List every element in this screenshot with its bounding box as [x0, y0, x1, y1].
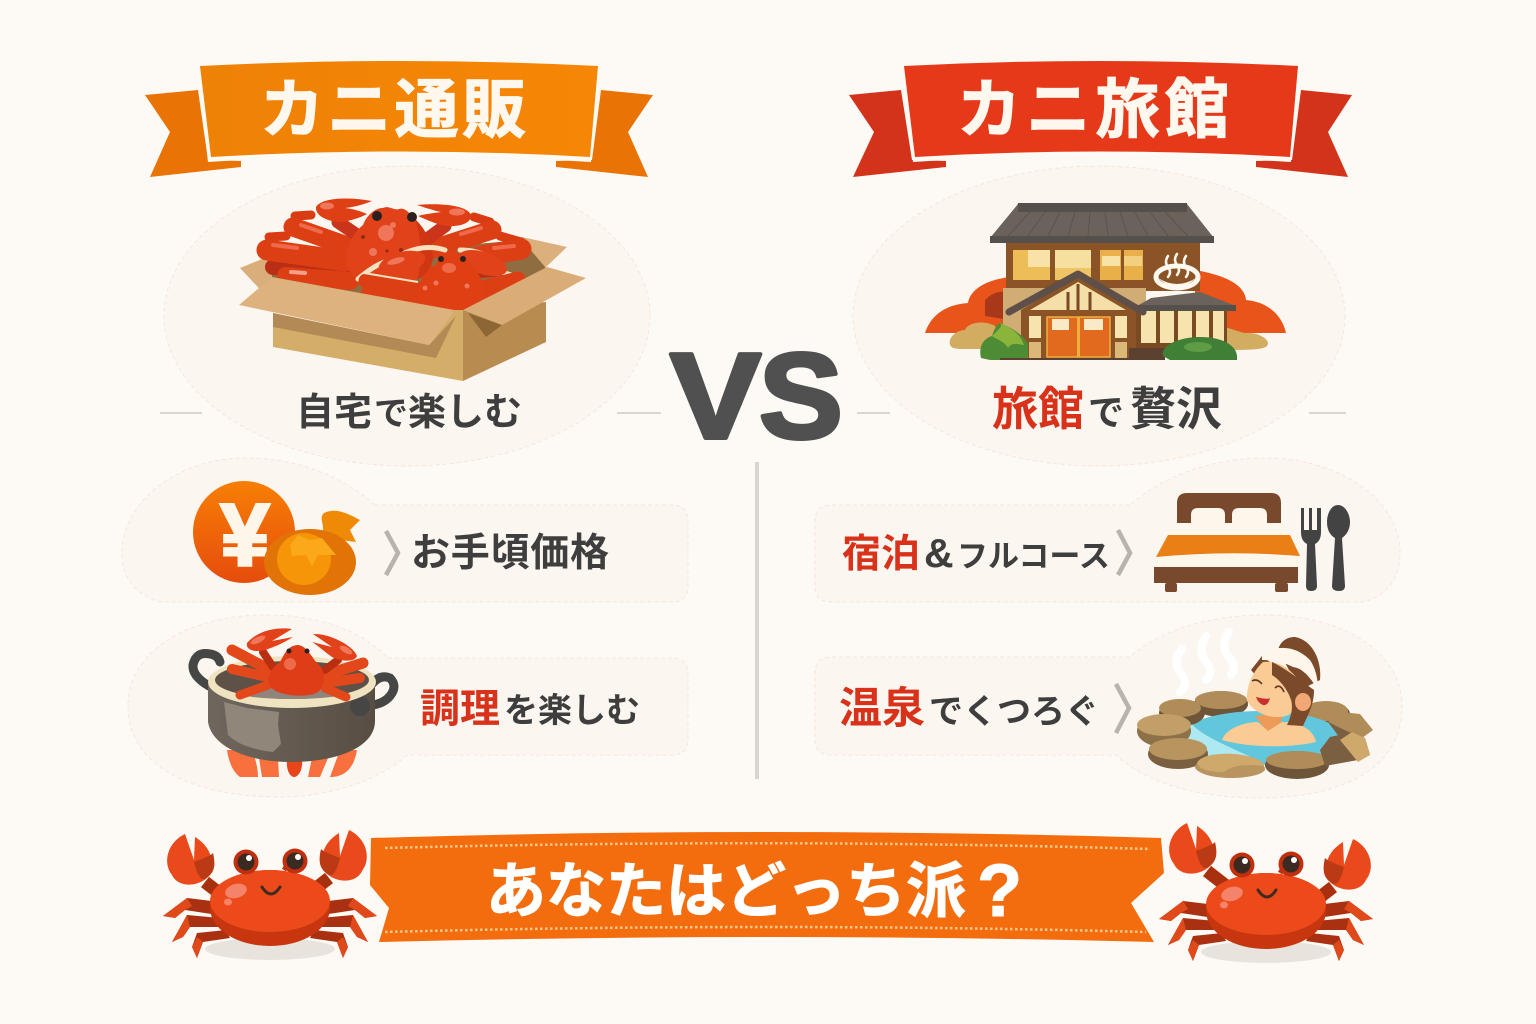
small crab [358, 245, 520, 310]
row: affordable price [122, 458, 688, 602]
icon: yen coin and money bag [193, 481, 360, 595]
bubble: ryokan [853, 166, 1345, 466]
illustration: crabs in cardboard box [239, 199, 586, 381]
caption: luxury at a ryokan: 旅館 [992, 383, 1084, 435]
bubble: mail order [164, 166, 650, 466]
label: 調理 [420, 687, 500, 731]
label: でくつろぐ [929, 693, 1099, 731]
caption: enjoy at home: 自宅 [296, 392, 372, 434]
illustration: ryokan building [925, 203, 1286, 360]
VS mark: S [759, 329, 843, 465]
row: relax in hot spring [815, 615, 1402, 798]
panel: ryokan hero [849, 61, 1352, 466]
chevron [386, 531, 398, 575]
center divider [755, 462, 759, 779]
label: お手頃価格 [411, 532, 609, 575]
panel: mail order hero [145, 61, 653, 466]
label: フルコース [957, 539, 1110, 574]
icon: crab in hot pot [193, 628, 394, 777]
bubble pill [815, 615, 1402, 798]
bottom banner: which do you prefer: あなたはどっち派 [486, 858, 966, 925]
heading ribbon: mail order [145, 61, 653, 177]
bubble pill [128, 615, 688, 797]
bubble pill [122, 458, 688, 602]
caption: luxury at a ryokan: 贅沢 [1130, 383, 1222, 435]
mascot: right crab [1159, 823, 1373, 963]
caption: enjoy at home: 楽しむ [408, 392, 522, 434]
caption: luxury at a ryokan: で [1088, 392, 1124, 433]
row: stay and full course [815, 458, 1400, 602]
bottom banner: which do you prefer: ? [977, 849, 1022, 932]
icon: yen coin and money bag: ¥ [221, 485, 270, 584]
label: 宿泊 [842, 533, 920, 576]
bottom banner: which do you prefer [370, 832, 1164, 942]
VS mark [670, 329, 843, 465]
chevron [1118, 530, 1130, 575]
heading ribbon: ryokan: カニ旅館 [957, 74, 1229, 146]
label: 温泉 [839, 685, 925, 733]
VS mark: V [670, 329, 761, 464]
icon: bed and cutlery [1154, 493, 1350, 592]
row: enjoy cooking [128, 615, 688, 797]
mascot: left crab [163, 830, 377, 960]
caption: enjoy at home: で [374, 395, 408, 433]
divider dashes [160, 412, 1346, 414]
icon: person bathing in hot spring [1137, 632, 1373, 779]
heading ribbon: ryokan [849, 61, 1352, 177]
heading ribbon: mail order: カニ通販 [260, 74, 526, 146]
chevron [1116, 684, 1129, 733]
label: を楽しむ [504, 692, 640, 730]
bubble pill [815, 458, 1400, 602]
label: & [924, 530, 954, 576]
